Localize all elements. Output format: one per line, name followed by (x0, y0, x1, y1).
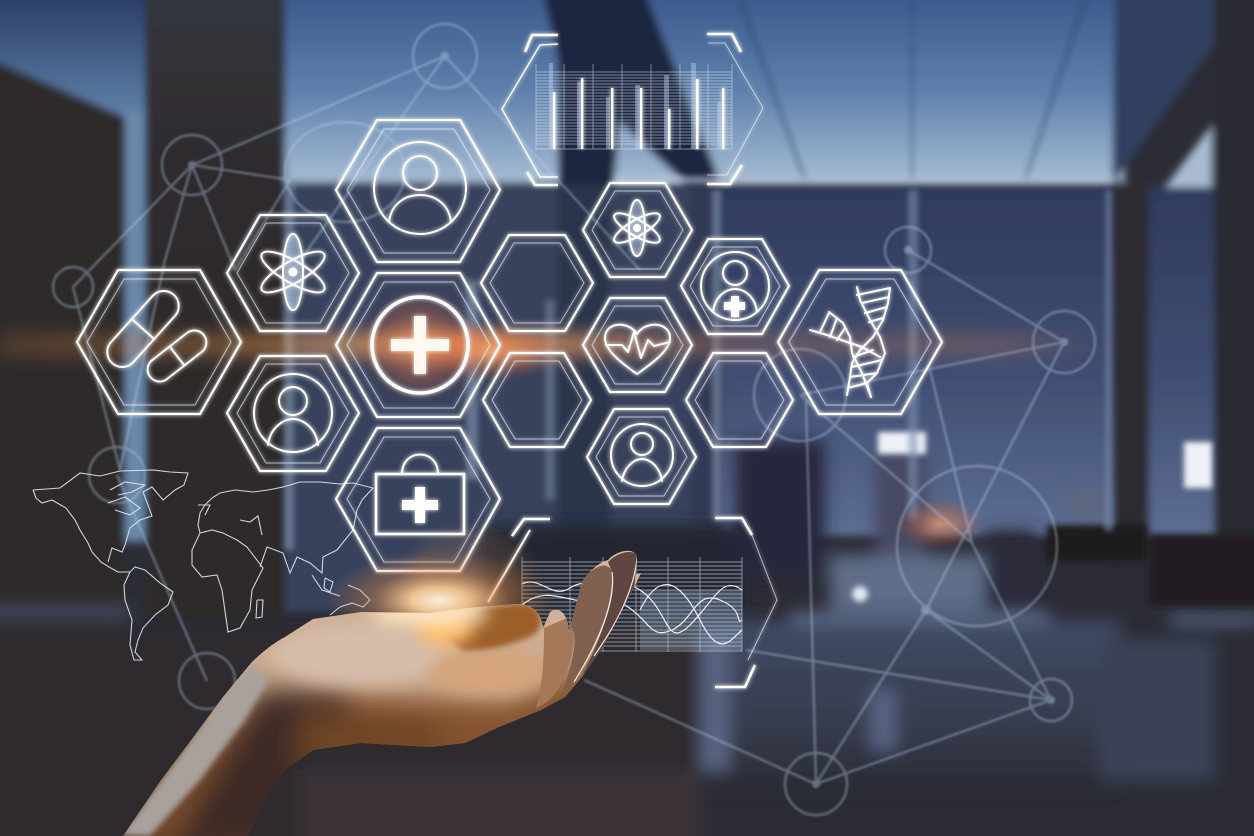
light flare: horizontal lens streak (0, 322, 1110, 550)
icon: person in circle (611, 424, 673, 486)
network diagram: thin lines and node circles (53, 24, 1095, 815)
lit wrist edge (120, 664, 268, 836)
hexagon: person, small (587, 409, 696, 504)
icon: heart with pulse line (605, 325, 670, 374)
hand (123, 550, 641, 836)
hexagon: empty, right (686, 353, 793, 447)
icon: two capsules (101, 285, 211, 386)
chart grid (536, 64, 732, 149)
hexagon: empty, lower (483, 353, 591, 447)
world map outline (33, 470, 373, 660)
hexagon: atom, small (583, 183, 692, 277)
hexagon: heart (583, 298, 692, 392)
hexagon: empty, upper (481, 235, 593, 331)
palm highlight (270, 625, 450, 685)
hexagon: atom, large (227, 215, 359, 331)
icon: cross in circle (372, 297, 468, 393)
arm shadow (130, 650, 630, 836)
hexagon: medical cross, centre (336, 273, 500, 417)
icon: first aid case (376, 454, 464, 534)
hexagon: first aid kit (336, 428, 500, 571)
bottom line chart with hexagonal frame (488, 518, 777, 687)
hexagon: DNA (778, 270, 942, 414)
top bar chart with hexagonal frame (502, 34, 763, 185)
hexagon: person, medium (227, 356, 359, 471)
icon: person in circle (374, 142, 466, 234)
hexagon: pills (77, 270, 241, 414)
icon: atom (256, 234, 330, 310)
icon: person in circle (254, 374, 332, 452)
thumb (442, 604, 541, 650)
fingers (536, 618, 574, 708)
icon: DNA helix (810, 287, 890, 397)
glow above the palm (325, 530, 555, 650)
frame brackets (502, 34, 763, 185)
hexagon: person, large (336, 120, 500, 262)
icon: atom (610, 200, 664, 256)
chart bars (549, 63, 724, 149)
icon: patient with plus (701, 252, 769, 320)
hexagon: person with plus (681, 239, 789, 334)
